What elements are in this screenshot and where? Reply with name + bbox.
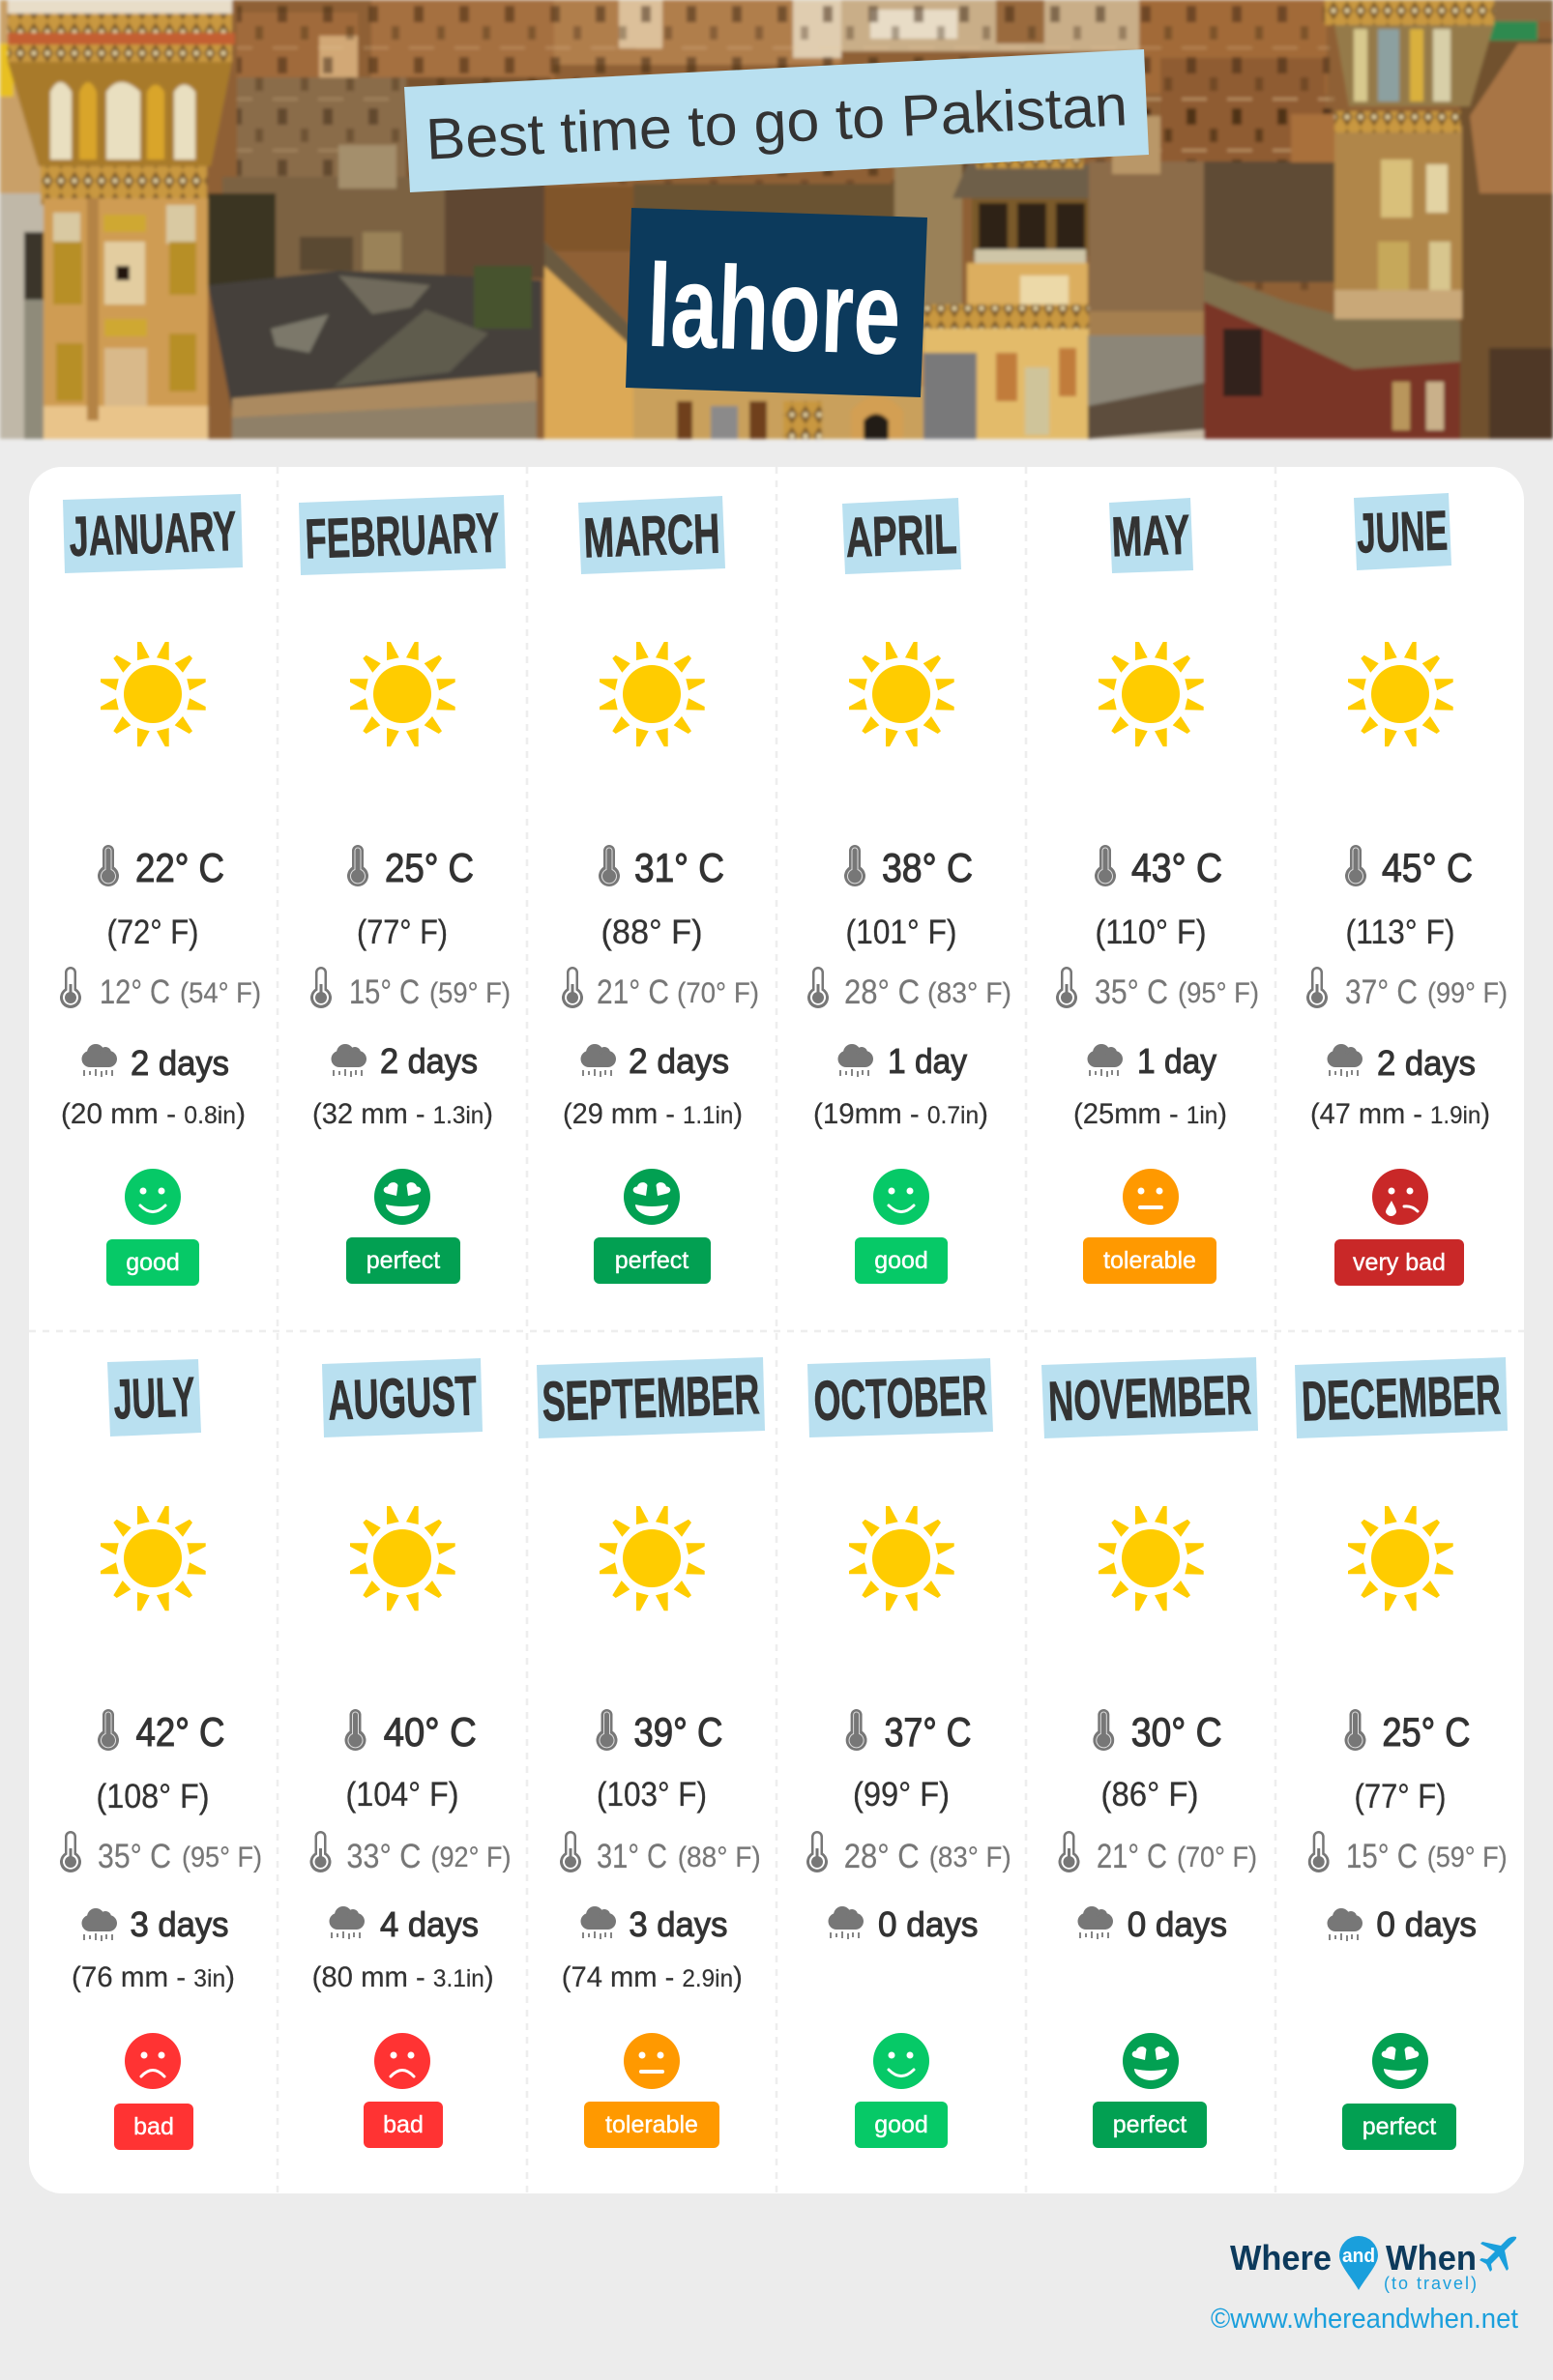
high temperature fahrenheit: (101° F) <box>845 914 957 951</box>
icon: bad face <box>125 2033 181 2089</box>
month label: JUNE <box>1356 499 1449 566</box>
rainy days: 2 days <box>131 1043 229 1083</box>
rating badge: bad <box>133 2113 174 2140</box>
header photo: Lahore mosque and old city <box>0 0 1553 439</box>
icon: sun <box>1099 1506 1204 1611</box>
rating badge: good <box>874 1247 928 1274</box>
city name banner: lahore <box>645 240 903 379</box>
icon: thermometer low <box>60 1831 81 1872</box>
icon: tolerable face <box>624 2033 680 2089</box>
rating badge <box>584 2102 719 2148</box>
icon: sun <box>1348 642 1453 746</box>
icon: thermometer low <box>806 1831 828 1872</box>
rainfall: (80 mm - 3.1in) <box>312 1961 494 1993</box>
low temperature: 33° C <box>346 1838 421 1875</box>
month label <box>842 498 961 574</box>
icon: perfect face <box>1123 2033 1179 2089</box>
icon: rain cloud <box>1077 1906 1113 1939</box>
high temperature: 39° C <box>633 1709 722 1755</box>
high temperature: 25° C <box>385 845 474 890</box>
rating badge <box>364 2102 443 2148</box>
high temperature fahrenheit: (72° F) <box>106 914 199 951</box>
high temperature fahrenheit: (99° F) <box>853 1776 950 1814</box>
icon: rain cloud <box>580 1906 616 1939</box>
high temperature: 38° C <box>882 845 973 890</box>
low temperature: 35° C <box>98 1838 171 1875</box>
rainy days: 3 days <box>629 1904 727 1944</box>
title banner <box>404 49 1149 192</box>
rating badge <box>1342 2104 1456 2150</box>
icon: thermometer low <box>560 1831 581 1872</box>
low temperature fahrenheit: (99° F) <box>1427 977 1508 1009</box>
rating badge <box>346 1237 460 1284</box>
rating badge <box>1093 2102 1207 2148</box>
low temperature fahrenheit: (70° F) <box>677 977 759 1009</box>
rainy days: 4 days <box>380 1904 479 1944</box>
icon: thermometer high <box>1345 845 1366 886</box>
icon: rain cloud <box>828 1906 864 1939</box>
month label <box>807 1358 993 1437</box>
high temperature: 43° C <box>1131 845 1222 890</box>
month: May <box>1056 498 1259 1284</box>
icon: very bad face <box>1372 1169 1428 1225</box>
icon: thermometer low <box>1058 1831 1079 1872</box>
low temperature: 37° C <box>1345 973 1418 1011</box>
rainfall: (47 mm - 1.9in) <box>1310 1098 1490 1130</box>
icon: sun <box>849 1506 954 1611</box>
month label <box>63 494 243 573</box>
high temperature: 31° C <box>634 845 724 890</box>
logo tagline: (to travel) <box>1384 2274 1477 2293</box>
rating badge <box>1083 1237 1216 1284</box>
month: January <box>60 494 261 1286</box>
icon: thermometer low <box>60 967 81 1008</box>
rainy days: 0 days <box>878 1904 979 1944</box>
low temperature fahrenheit: (83° F) <box>929 1842 1011 1873</box>
month: October <box>806 1358 1011 2148</box>
rating badge: very bad <box>1353 1249 1446 1276</box>
month label <box>578 496 725 574</box>
rating badge: tolerable <box>1103 1247 1196 1274</box>
icon: thermometer high <box>347 845 368 886</box>
icon: thermometer high <box>844 845 865 886</box>
month label: MARCH <box>582 503 721 569</box>
rating badge <box>594 1237 711 1284</box>
month label <box>537 1357 765 1438</box>
month label: NOVEMBER <box>1047 1363 1252 1434</box>
month: June <box>1306 493 1508 1286</box>
rainy days: 0 days <box>1128 1904 1227 1944</box>
rainy days: 2 days <box>629 1041 729 1081</box>
high temperature fahrenheit: (104° F) <box>346 1776 458 1814</box>
high temperature fahrenheit: (77° F) <box>1354 1778 1447 1815</box>
icon: thermometer high <box>98 1709 119 1751</box>
title banner: Best time to go to Pakistan <box>425 73 1128 172</box>
rating badge: good <box>874 2111 928 2138</box>
month label <box>1041 1357 1258 1438</box>
icon: thermometer low <box>1306 967 1328 1008</box>
low temperature fahrenheit: (88° F) <box>678 1842 761 1873</box>
high temperature fahrenheit: (88° F) <box>601 914 702 951</box>
icon: rain cloud <box>580 1044 616 1077</box>
rating badge: tolerable <box>605 2111 698 2138</box>
low temperature fahrenheit: (95° F) <box>1178 977 1259 1009</box>
month label <box>1354 493 1451 570</box>
low temperature: 21° C <box>1097 1838 1167 1875</box>
low temperature fahrenheit: (83° F) <box>927 977 1011 1009</box>
icon: thermometer high <box>1093 1709 1114 1751</box>
rainfall: (29 mm - 1.1in) <box>563 1098 743 1130</box>
icon: perfect face <box>374 1169 430 1225</box>
rainfall: (74 mm - 2.9in) <box>562 1961 743 1993</box>
rainfall: (25mm - 1in) <box>1073 1098 1227 1130</box>
icon: thermometer high <box>599 845 620 886</box>
rainfall: (32 mm - 1.3in) <box>312 1098 493 1130</box>
logo: Where and When to travel <box>1230 2236 1516 2293</box>
icon: thermometer high <box>1344 1709 1365 1751</box>
high temperature fahrenheit: (103° F) <box>597 1776 707 1814</box>
high temperature: 45° C <box>1382 845 1473 890</box>
rating badge: perfect <box>615 1247 689 1274</box>
city name banner <box>626 208 927 397</box>
icon: thermometer low <box>1056 967 1077 1008</box>
logo text: and: and <box>1342 2246 1375 2267</box>
month: September <box>537 1357 765 2148</box>
icon: sun <box>101 642 206 746</box>
low temperature: 35° C <box>1095 973 1168 1011</box>
low temperature fahrenheit: (95° F) <box>182 1842 262 1873</box>
month label <box>107 1359 201 1437</box>
low temperature fahrenheit: (59° F) <box>429 977 511 1009</box>
month label: JULY <box>112 1366 196 1431</box>
high temperature: 22° C <box>135 845 224 890</box>
icon: thermometer low <box>310 967 332 1008</box>
icon: rain cloud <box>331 1044 366 1077</box>
low temperature fahrenheit: (92° F) <box>431 1842 511 1873</box>
rating badge: perfect <box>366 1247 440 1274</box>
rating badge <box>106 1239 199 1286</box>
rainy days: 0 days <box>1376 1904 1477 1944</box>
month: July <box>60 1359 262 2150</box>
month label <box>322 1358 483 1437</box>
logo text: Where: Where <box>1230 2238 1332 2278</box>
high temperature fahrenheit: (86° F) <box>1100 1776 1199 1814</box>
icon: tolerable face <box>1123 1169 1179 1225</box>
month label: FEBRUARY <box>304 502 501 570</box>
icon: good face <box>125 1169 181 1225</box>
icon: rain cloud <box>81 1908 117 1941</box>
icon: rain cloud <box>329 1906 365 1939</box>
rating badge: bad <box>383 2111 424 2138</box>
month label: APRIL <box>844 503 958 569</box>
rainy days: 2 days <box>380 1041 478 1081</box>
rainfall: (76 mm - 3in) <box>72 1961 235 1993</box>
rating badge: perfect <box>1113 2111 1187 2138</box>
icon: good face <box>873 1169 929 1225</box>
low temperature: 28° C <box>844 1838 920 1875</box>
low temperature fahrenheit: (59° F) <box>1427 1842 1508 1873</box>
rating badge <box>1334 1239 1464 1286</box>
rainfall: (19mm - 0.7in) <box>813 1098 988 1130</box>
low temperature fahrenheit: (70° F) <box>1177 1842 1257 1873</box>
month: March <box>562 496 759 1284</box>
month label: JANUARY <box>68 500 238 568</box>
rating badge: perfect <box>1363 2113 1436 2140</box>
website url: ©www.whereandwhen.net <box>1211 2304 1518 2335</box>
month label <box>299 495 506 575</box>
icon: rain cloud <box>1087 1044 1123 1077</box>
icon: airplane <box>1480 2237 1516 2272</box>
high temperature: 42° C <box>135 1709 224 1755</box>
icon: perfect face <box>1372 2033 1428 2089</box>
month: August <box>309 1358 511 2148</box>
high temperature: 25° C <box>1382 1709 1470 1755</box>
high temperature fahrenheit: (110° F) <box>1095 914 1207 951</box>
icon: thermometer high <box>98 845 119 886</box>
low temperature: 21° C <box>597 973 669 1011</box>
high temperature: 40° C <box>384 1709 477 1755</box>
month: April <box>807 498 1011 1284</box>
icon: sun <box>600 1506 705 1611</box>
rainy days: 3 days <box>130 1904 228 1944</box>
icon: thermometer high <box>1095 845 1116 886</box>
icon: thermometer high <box>846 1709 867 1751</box>
rainy days: 1 day <box>1137 1041 1216 1081</box>
icon: sun <box>1348 1506 1453 1611</box>
rainy days: 1 day <box>888 1041 967 1081</box>
logo text: When: When <box>1386 2238 1477 2278</box>
icon: perfect face <box>624 1169 680 1225</box>
month label: OCTOBER <box>812 1364 988 1433</box>
icon: thermometer high <box>596 1709 617 1751</box>
rating badge <box>114 2104 193 2150</box>
icon: good face <box>873 2033 929 2089</box>
icon: thermometer low <box>562 967 583 1008</box>
month label: SEPTEMBER <box>541 1363 761 1434</box>
low temperature: 28° C <box>844 973 920 1011</box>
high temperature fahrenheit: (108° F) <box>97 1778 209 1815</box>
rating badge: good <box>126 1249 180 1276</box>
icon: rain cloud <box>837 1044 873 1077</box>
icon: rain cloud <box>1327 1044 1363 1077</box>
low temperature fahrenheit: (54° F) <box>180 977 261 1009</box>
rating badge <box>855 1237 948 1284</box>
high temperature: 30° C <box>1131 1709 1222 1755</box>
low temperature: 12° C <box>100 973 170 1011</box>
icon: thermometer low <box>1308 1831 1330 1872</box>
icon: thermometer high <box>344 1709 366 1751</box>
rainfall: (20 mm - 0.8in) <box>61 1098 246 1130</box>
month label: MAY <box>1110 504 1191 568</box>
high temperature fahrenheit: (113° F) <box>1346 914 1454 951</box>
rating badge <box>855 2102 948 2148</box>
high temperature: 37° C <box>884 1709 971 1755</box>
icon: thermometer low <box>309 1831 331 1872</box>
icon: sun <box>1099 642 1204 746</box>
month label: AUGUST <box>327 1364 478 1433</box>
month: December <box>1295 1357 1508 2150</box>
icon: sun <box>350 642 455 746</box>
icon: sun <box>849 642 954 746</box>
rainy days: 2 days <box>1377 1043 1476 1083</box>
icon: sun <box>350 1506 455 1611</box>
high temperature fahrenheit: (77° F) <box>357 914 448 951</box>
low temperature: 15° C <box>1346 1838 1418 1875</box>
icon: thermometer low <box>807 967 829 1008</box>
icon: sun <box>600 642 705 746</box>
icon: rain cloud <box>1327 1908 1363 1941</box>
low temperature: 15° C <box>349 973 420 1011</box>
icon: map pin <box>1339 2236 1378 2290</box>
month: November <box>1041 1357 1258 2148</box>
icon: rain cloud <box>81 1044 117 1077</box>
icon: bad face <box>374 2033 430 2089</box>
icon: sun <box>101 1506 206 1611</box>
low temperature: 31° C <box>597 1838 667 1875</box>
panel: months card <box>29 467 1524 2193</box>
month: February <box>299 495 511 1284</box>
month label <box>1109 498 1193 573</box>
